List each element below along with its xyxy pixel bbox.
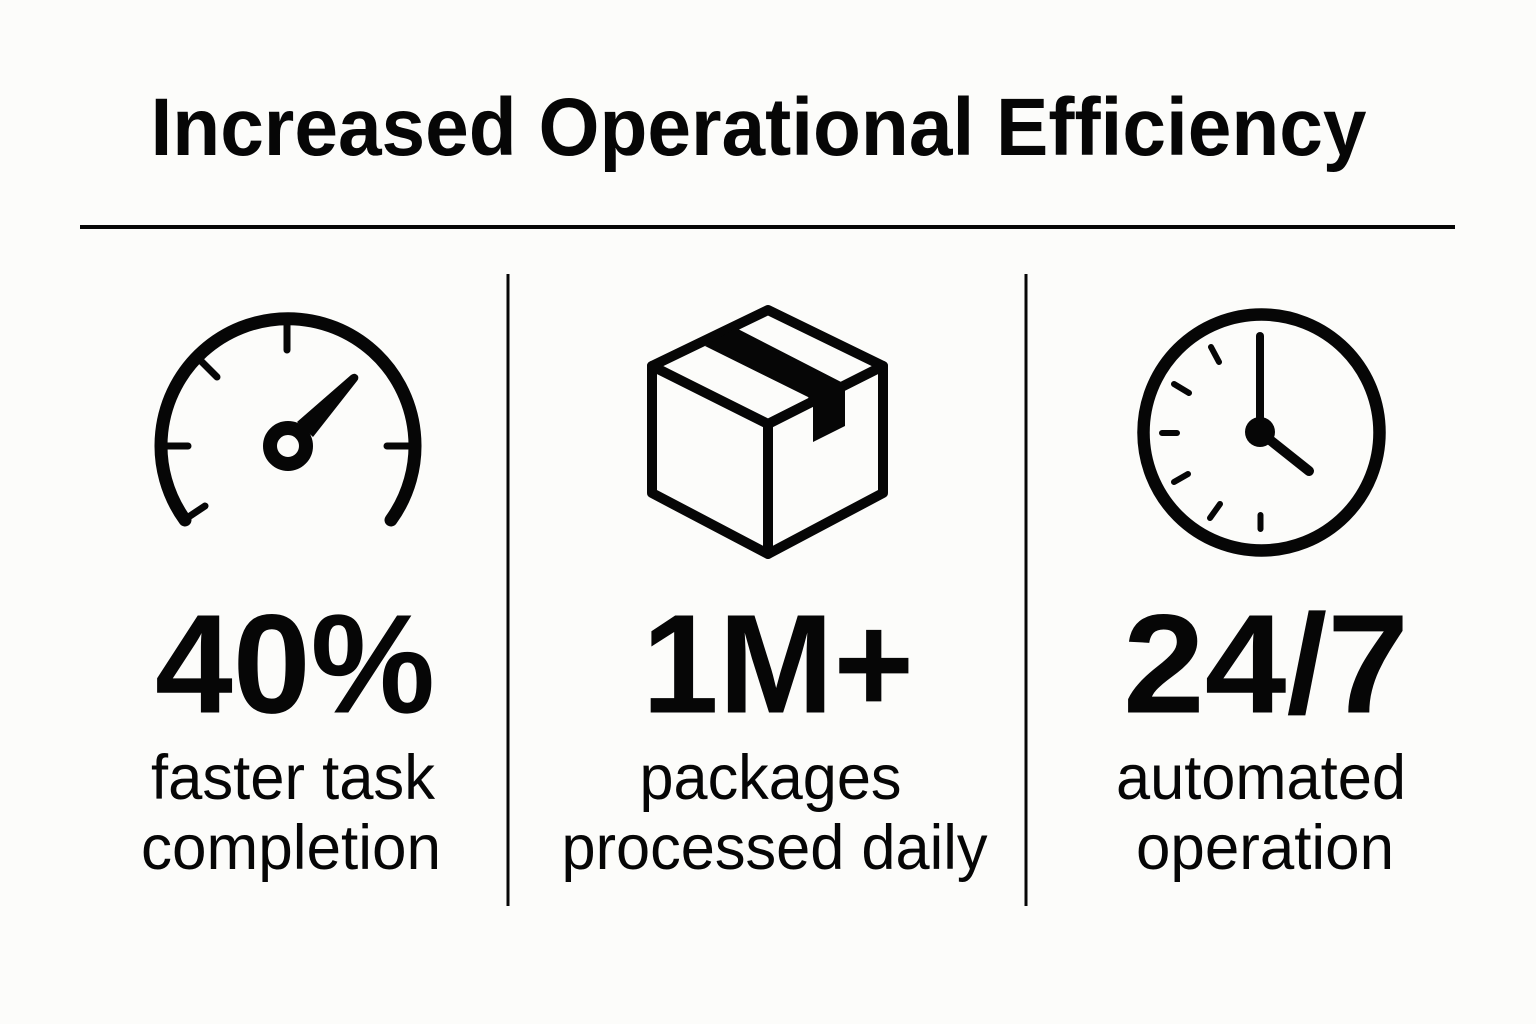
panel: automated operation xyxy=(1116,314,1409,883)
label: packages processed daily: processed daily xyxy=(562,813,988,883)
label: faster task completion: completion xyxy=(141,813,441,883)
icon: cardboard box xyxy=(652,310,883,554)
panel: faster task completion xyxy=(141,319,441,883)
stat: 24/7: 24/7 xyxy=(1123,584,1409,742)
label: faster task completion: faster task xyxy=(151,743,435,813)
label: automated operation: operation xyxy=(1136,813,1394,883)
label: packages processed daily: packages xyxy=(640,743,902,813)
title: Increased Operational Efficiency xyxy=(150,82,1367,173)
stat: 40%: 40% xyxy=(155,584,435,742)
label: automated operation: automated xyxy=(1116,743,1406,813)
icon: speedometer gauge xyxy=(161,319,415,520)
icon: clock xyxy=(1144,314,1380,550)
panel: packages processed daily xyxy=(562,310,988,883)
stat: 1M+: 1M+ xyxy=(642,584,914,742)
